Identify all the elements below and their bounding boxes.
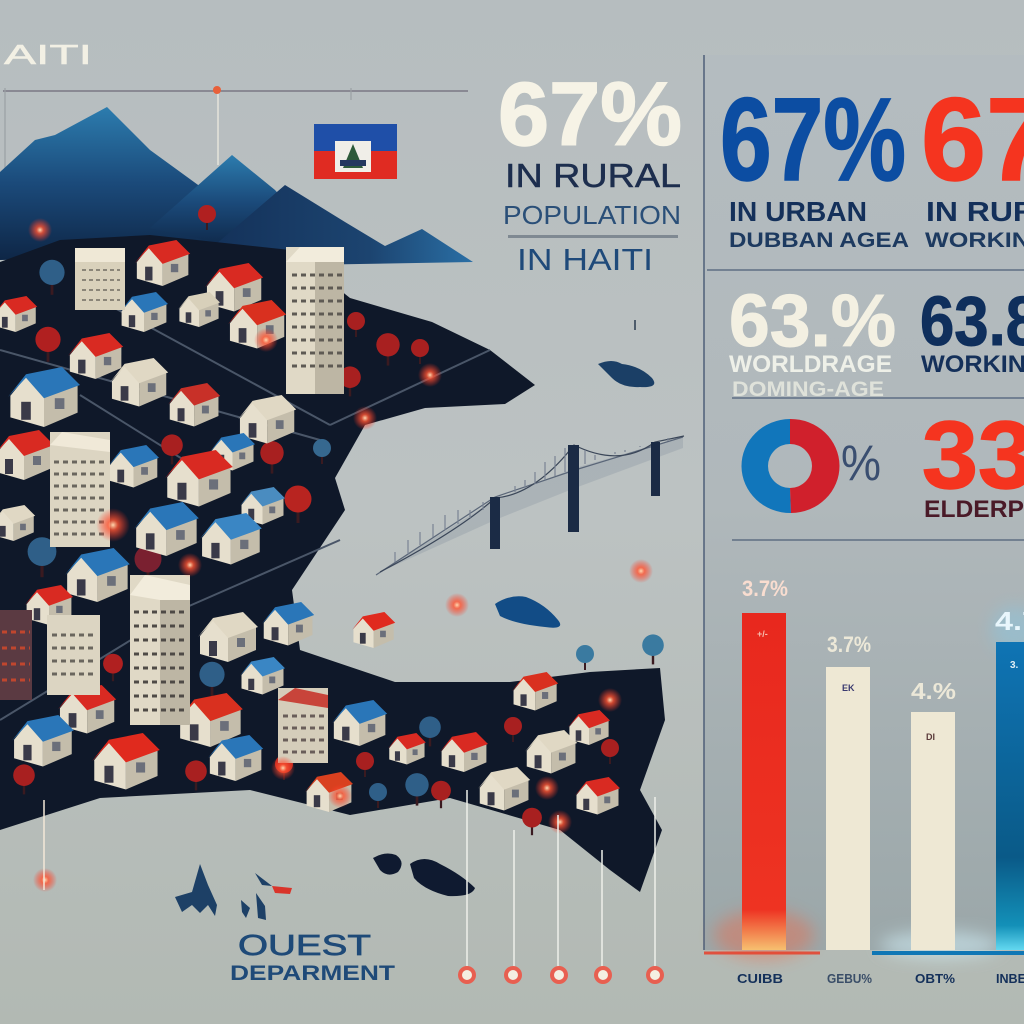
bar value labels: 3. <box>1010 660 1019 671</box>
bar chart <box>704 576 1024 986</box>
baseline <box>704 952 820 954</box>
headline stat: 67% in rural: POPULATION <box>503 200 681 230</box>
bar inner marks <box>757 629 935 742</box>
cream bar 2 <box>911 712 955 950</box>
right panel background <box>704 55 1024 950</box>
stat: 67 in rural: WORKIN <box>925 229 1024 252</box>
house: lone coastal house <box>352 612 395 648</box>
mountains <box>0 107 473 265</box>
islets <box>373 361 654 896</box>
stat: 67% in urban <box>720 74 909 252</box>
stat: 67 in rural: IN RUR <box>926 196 1024 227</box>
bar value labels <box>742 576 1024 704</box>
bar value labels: 3.7% <box>827 632 871 657</box>
headline stat: 67% in rural: IN HAITI <box>517 242 653 277</box>
top timeline rule <box>3 86 468 180</box>
apartment towers <box>0 247 344 763</box>
stat: 63.% world: 63.% <box>729 279 896 362</box>
bar glows <box>714 910 814 960</box>
bar category labels: OBT% <box>915 971 955 986</box>
cream bar 1 <box>826 667 870 950</box>
bar inner marks: +/- <box>757 629 768 639</box>
trees <box>13 205 664 835</box>
map: Ouest department landmass <box>0 205 665 892</box>
bar inner marks: DI <box>926 732 935 742</box>
silhouette figures <box>175 864 292 920</box>
headline stat: 67% in rural: IN RURAL <box>505 157 681 194</box>
bar category labels <box>737 971 1024 986</box>
glowing lights <box>28 218 653 892</box>
stat: 67% in urban: IN URBAN <box>729 196 867 227</box>
roads <box>0 300 490 720</box>
stat: 33 elderly: ELDERP <box>924 496 1024 523</box>
stat: 67% in urban: DUBBAN AGEA <box>729 229 909 252</box>
donut chart <box>741 419 840 513</box>
headline stat: 67% in rural: 67% <box>498 65 682 165</box>
bar inner marks: EK <box>842 683 855 693</box>
bar value labels: 4.% <box>911 678 956 704</box>
red bar <box>742 613 786 950</box>
headline stat: 67% in rural <box>498 65 682 277</box>
stat: 63.% world: DOMING-AGE <box>732 378 884 401</box>
small speck <box>634 320 636 330</box>
stat: 63.% world: WORLDRAGE <box>729 351 892 378</box>
icon: Haitian flag <box>314 124 397 179</box>
label: Ouest Department <box>230 930 395 985</box>
bridge <box>376 436 684 575</box>
blue bar <box>996 642 1024 950</box>
stat: 67% in urban: 67% <box>720 74 906 206</box>
label: Ouest Department: DEPARMENT <box>230 962 395 985</box>
bar category labels: CUIBB <box>737 971 783 986</box>
bar category labels: GEBU% <box>827 971 872 986</box>
location pins <box>460 790 662 982</box>
houses <box>0 240 620 814</box>
percent sign: % <box>841 435 881 491</box>
panel rules <box>704 55 1024 950</box>
bar value labels: 3.7% <box>742 576 788 601</box>
landmass <box>0 235 665 892</box>
light beam bottom left <box>43 800 45 890</box>
label: Ouest Department: OUEST <box>238 930 371 962</box>
stat: 63.8 working: WORKIN <box>921 351 1024 378</box>
title: Haiti: AITI <box>4 39 92 70</box>
stat: 63.% world <box>729 279 896 401</box>
